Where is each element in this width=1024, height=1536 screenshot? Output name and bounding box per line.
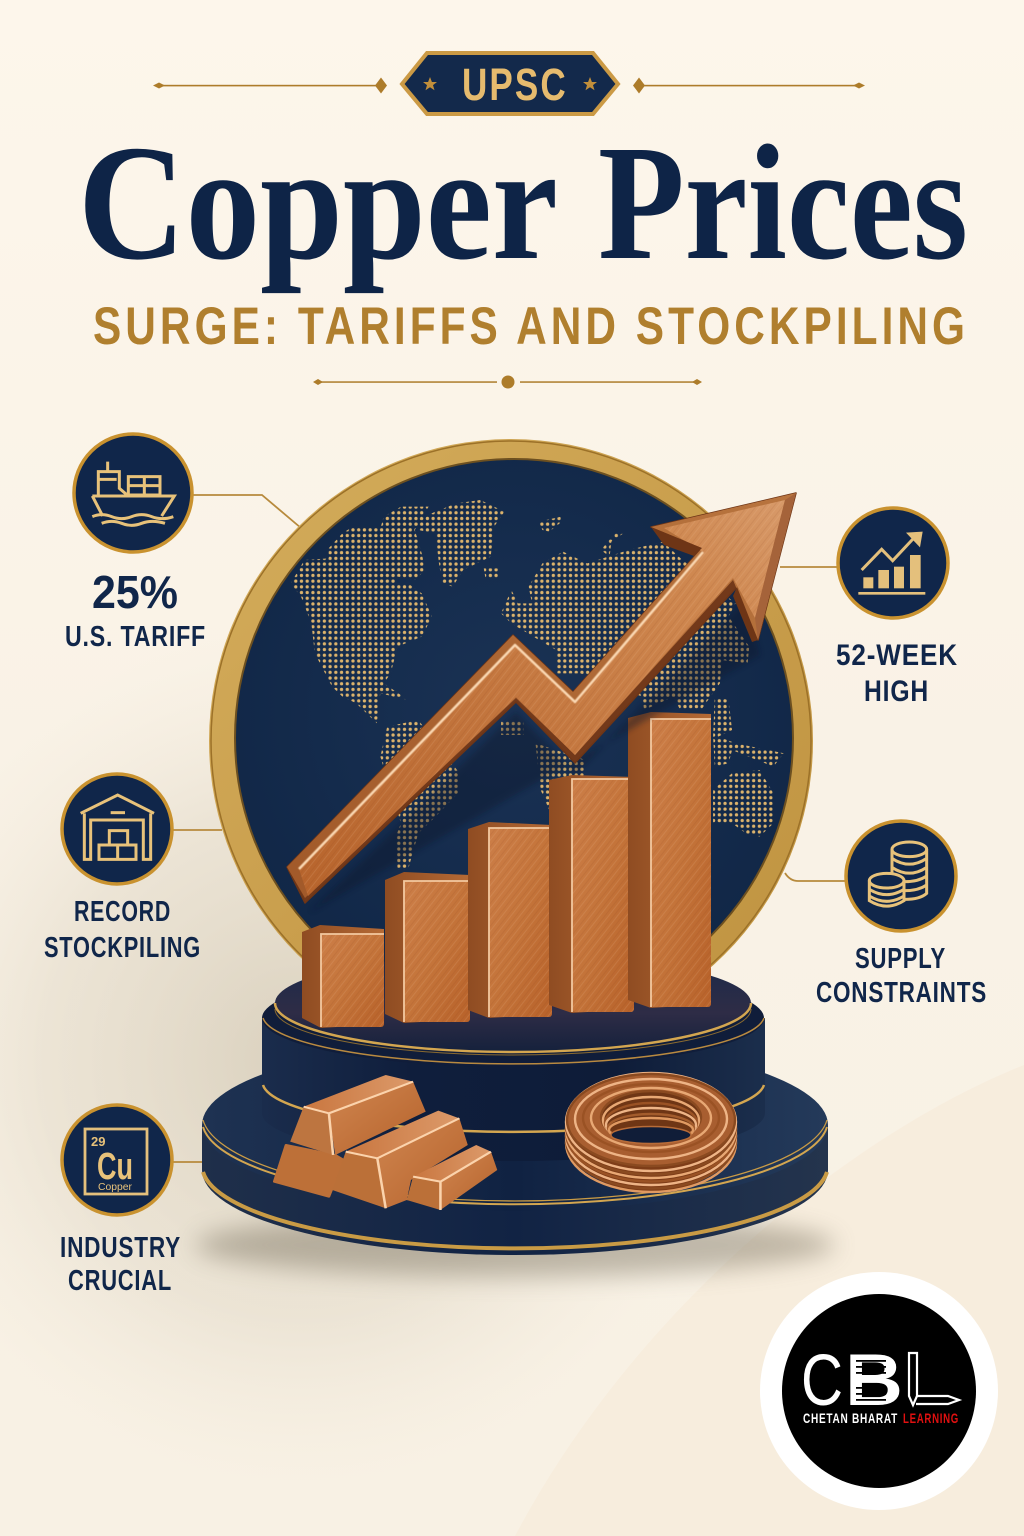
logo wordmark: LEARNING [903,1410,959,1426]
arrowhead bevel [755,493,796,640]
badge label: UPSC [462,59,566,110]
bar 5 [628,712,711,1008]
arrow lower edge [287,493,796,903]
podium lower disc [202,1039,828,1255]
subtitle: SURGE: TARIFFS AND STOCKPILING [93,298,965,356]
logo mark CBL: B [845,1340,903,1421]
icon: coin stacks [846,821,956,931]
bar 3 [468,822,552,1018]
logo black disc [782,1294,976,1488]
badge stars [423,77,597,90]
icon: copper element tile [62,1105,172,1215]
stat label: SUPPLY [855,943,946,975]
icon: cargo ship [74,434,192,552]
stat value: 25% [92,566,178,618]
icon: growth chart [838,508,948,618]
copper wire coil [565,1073,737,1192]
podium [202,954,828,1255]
title [78,111,968,294]
logo: Chetan Bharat Learning [760,1272,998,1510]
stat: supply constraints [816,821,987,1009]
badge right ornament line [633,78,865,94]
stat label [836,639,958,708]
copper ingots [274,1075,497,1210]
arrow: rising copper trend [287,493,796,912]
stat label: CRUCIAL [68,1265,172,1297]
logo white ring [760,1272,998,1510]
stat: record stockpiling [44,774,201,964]
bar 1 [302,925,384,1028]
podium upper tier [262,954,765,1161]
stat: 25% U.S. tariff [65,434,206,653]
logo mark CBL: C [801,1341,843,1421]
connector lines [173,495,847,1162]
badge left ornament line [153,78,387,94]
title divider [313,376,702,388]
bar chart: copper bars [302,712,711,1028]
stat label [60,1232,181,1297]
bar 4 [549,775,634,1013]
stat label: U.S. TARIFF [65,621,206,653]
stat label [44,896,201,964]
ingot rear [274,1145,344,1197]
stat label: HIGH [864,675,929,708]
stat label: INDUSTRY [60,1232,181,1264]
podium top plate [275,954,751,1052]
icon: copper element tile: 29 [91,1134,105,1149]
ingot top [290,1075,426,1155]
icon: warehouse [62,774,172,884]
ingot small [407,1145,497,1210]
dotted world map [291,500,784,870]
arrow highlight [299,552,703,869]
arrow upper bevel [287,493,796,898]
icon: copper element tile: Cu [97,1146,133,1188]
badge hexagon [402,53,618,114]
bar 2 [385,872,470,1023]
icon: copper element tile: Copper [98,1182,133,1193]
ingot large [332,1111,468,1208]
podium shadow [195,1213,835,1277]
stat label [816,943,987,1009]
header badge: UPSC [153,53,865,114]
stat: industry crucial [60,1105,181,1297]
stat label: 52-WEEK [836,639,958,672]
central globe disc [209,439,813,1043]
title: Copper [78,111,558,294]
stat label: STOCKPILING [44,932,201,964]
arrow shadow [310,600,760,912]
globe gold ring [209,439,813,1043]
arrow face [299,500,785,896]
title: Prices [598,111,968,294]
stat label: RECORD [74,896,171,928]
logo wordmark: CHETAN BHARAT [803,1410,898,1426]
stat: 52-week high [836,508,958,708]
globe navy face [235,459,793,1017]
logo mark CBL [801,1340,959,1421]
